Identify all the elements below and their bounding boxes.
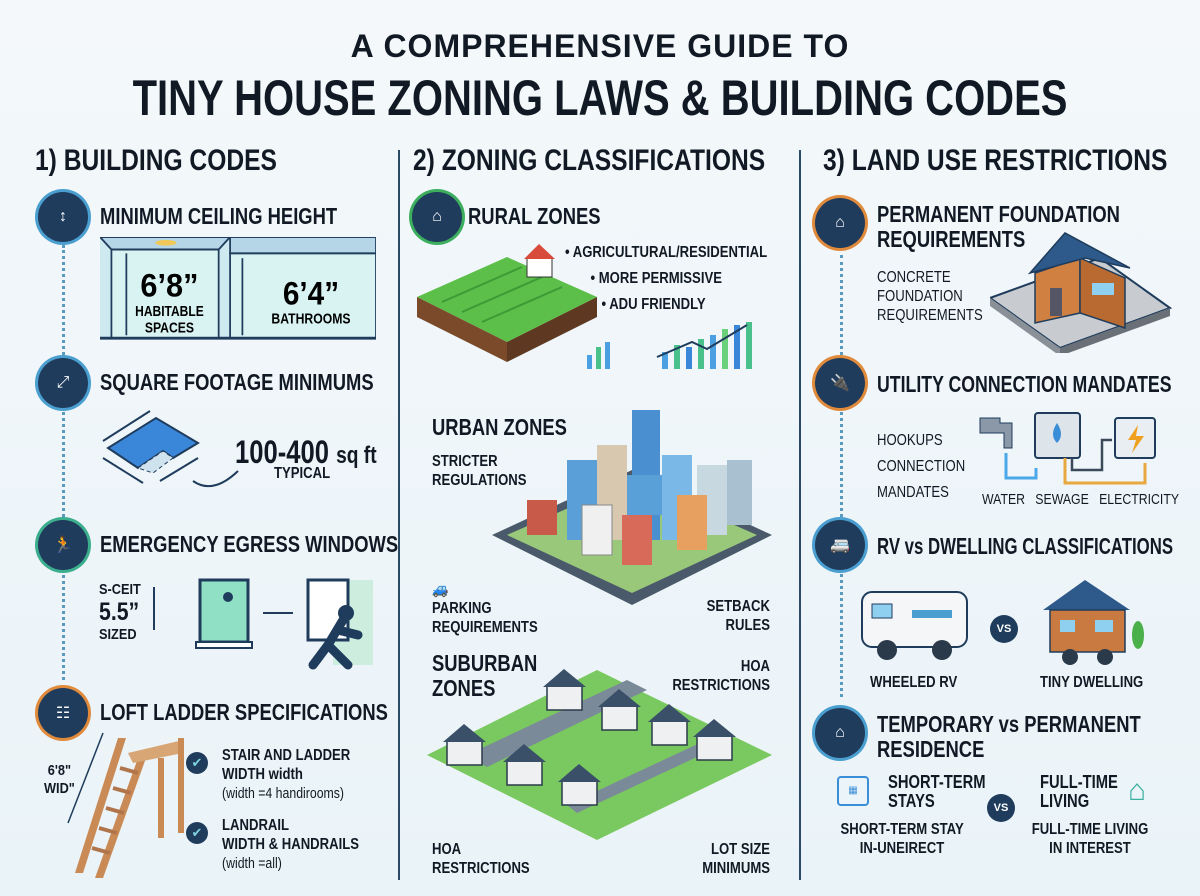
- checklist: WIDTH width: [222, 766, 303, 783]
- labels: WATER SEWAGE ELECTRICITY: [982, 491, 1179, 508]
- window size label: S-CEIT: [99, 581, 141, 598]
- column header 2: 2) ZONING CLASSIFICATIONS: [413, 144, 765, 177]
- checklist: (width =4 handirooms): [222, 785, 344, 802]
- label: parking: 🚙: [432, 581, 448, 598]
- ladder drawing: [67, 732, 184, 878]
- icon: plug: 🔌: [830, 375, 850, 392]
- ladder label: [44, 762, 75, 797]
- label: stricter: [432, 453, 527, 489]
- label: lot size: LOT SIZE: [711, 841, 770, 858]
- icon: exit: 🏃: [53, 537, 73, 554]
- label: hoa top: HOA: [741, 658, 770, 675]
- ceiling diagram: 6’4”: [283, 275, 339, 312]
- panel: permanent foundation: [812, 195, 1172, 353]
- heading: RURAL ZONES: [468, 203, 601, 229]
- short-term: [888, 773, 986, 811]
- panel: loft ladder: [35, 685, 388, 878]
- label: stricter: STRICTER: [432, 453, 498, 470]
- panel: egress windows: [35, 517, 398, 670]
- icon: foundation: ⌂: [835, 214, 845, 231]
- checklist: LANDRAIL: [222, 817, 289, 834]
- vs badge: [990, 615, 1018, 643]
- suburb illustration: [427, 669, 772, 840]
- icon: rural: [412, 192, 462, 242]
- panel: temporary vs permanent: [812, 705, 1148, 857]
- sub labels: [840, 820, 964, 858]
- text: CONCRETE: [877, 269, 951, 286]
- city illustration: [492, 410, 772, 605]
- checklist: [186, 747, 359, 872]
- icon: ladder: ☷: [56, 705, 70, 722]
- label: parking: [432, 581, 538, 636]
- checklist: STAIR AND LADDER: [222, 747, 350, 764]
- text: HOOKUPS: [877, 432, 943, 449]
- icon: expand: [38, 358, 88, 408]
- sub labels: SHORT-TERM STAY: [840, 821, 964, 838]
- icon: foundation: [815, 198, 865, 248]
- label: hoa top: RESTRICTIONS: [672, 677, 770, 694]
- icon: ceiling: ↕: [59, 208, 67, 225]
- heading: ZONES: [432, 675, 495, 701]
- ladder label: WID": [44, 780, 75, 797]
- panel: temporary vs permanent: FULL-TIME LIVING: [1032, 821, 1148, 838]
- heading: PERMANENT FOUNDATION: [877, 201, 1120, 227]
- icon: house: ⌂: [1128, 774, 1146, 807]
- heading: SQUARE FOOTAGE MINIMUMS: [100, 369, 374, 395]
- heading: URBAN ZONES: [432, 414, 567, 440]
- icon: rv: [815, 520, 865, 570]
- panel: square footage: [35, 355, 377, 488]
- heading: REQUIREMENTS: [877, 226, 1025, 252]
- icon: ladder: [38, 688, 88, 738]
- window size label: 5.5”: [99, 598, 139, 626]
- window diagram: [153, 578, 373, 670]
- label: parking: REQUIREMENTS: [432, 619, 538, 636]
- vs badge: VS: [997, 623, 1011, 635]
- rv illustration: [861, 591, 968, 660]
- vs badge: [987, 794, 1015, 822]
- icon: calendar: ▦: [848, 785, 858, 796]
- icon: rural: ⌂: [432, 208, 442, 225]
- icon: calendar: [837, 776, 869, 806]
- label: setback: RULES: [726, 617, 770, 634]
- ceiling diagram: BATHROOMS: [271, 310, 351, 327]
- tiny house illustration: [1043, 580, 1144, 665]
- text: FOUNDATION: [877, 288, 963, 305]
- label: lot size: MINIMUMS: [702, 860, 770, 877]
- icon: plug: [815, 358, 865, 408]
- panel: suburban zones: [427, 650, 772, 877]
- short-term: STAYS: [888, 791, 935, 811]
- column header 1: 1) BUILDING CODES: [35, 144, 277, 177]
- panel: ceiling height: [35, 189, 376, 340]
- checklist: ✔: [192, 825, 202, 840]
- ceiling diagram: SPACES: [145, 319, 194, 336]
- stat: 100-400 sq ft: [235, 434, 377, 470]
- vs badge: VS: [994, 802, 1008, 814]
- icon: rv: 🚐: [830, 537, 850, 554]
- heading: RV vs DWELLING CLASSIFICATIONS: [877, 533, 1173, 559]
- window size label: [99, 581, 141, 643]
- panel: square footage: TYPICAL: [274, 465, 330, 482]
- heading: MINIMUM CEILING HEIGHT: [100, 203, 337, 229]
- label: lot size: [702, 841, 770, 877]
- icon: home: ⌂: [835, 724, 845, 741]
- full-time: FULL-TIME: [1040, 772, 1118, 792]
- floor plan diagram: [102, 410, 239, 488]
- panel: utility connection: [812, 355, 1179, 508]
- text: CONNECTION: [877, 458, 965, 475]
- ladder label: 6'8": [48, 762, 71, 779]
- full-time: LIVING: [1040, 791, 1089, 811]
- icon: expand: ⤢: [57, 374, 69, 391]
- label: hoa bottom: HOA: [432, 841, 461, 858]
- labels: WHEELED RV: [870, 674, 957, 691]
- label: hoa bottom: [432, 841, 530, 877]
- full-time: [1040, 773, 1118, 811]
- bar chart: [587, 322, 752, 369]
- label: stricter: REGULATIONS: [432, 472, 527, 489]
- heading: RESIDENCE: [877, 736, 984, 762]
- farm illustration: [417, 244, 597, 362]
- column header 3: 3) LAND USE RESTRICTIONS: [823, 144, 1167, 177]
- label: setback: SETBACK: [707, 598, 770, 615]
- panel: temporary vs permanent: IN INTEREST: [1049, 840, 1131, 857]
- heading: [877, 201, 1120, 252]
- label: hoa top: [672, 658, 770, 694]
- ceiling diagram: HABITABLE: [135, 302, 204, 319]
- panel: rural zones: [409, 189, 767, 369]
- bullets: [565, 244, 767, 313]
- panel: urban zones: [432, 410, 772, 636]
- label: parking: PARKING: [432, 600, 492, 617]
- checklist: WIDTH & HANDRAILS: [222, 836, 359, 853]
- heading: [877, 711, 1141, 762]
- text: [877, 269, 983, 324]
- sub labels: IN-UNEIRECT: [860, 840, 944, 857]
- utility diagram: [980, 412, 1156, 484]
- ceiling diagram: 6’8”: [140, 267, 198, 304]
- icon: ceiling: [38, 192, 88, 242]
- window size label: SIZED: [99, 626, 137, 643]
- title: TINY HOUSE ZONING LAWS & BUILDING CODES: [133, 70, 1067, 126]
- text: REQUIREMENTS: [877, 307, 983, 324]
- heading: [432, 650, 537, 701]
- heading: EMERGENCY EGRESS WINDOWS: [100, 531, 398, 557]
- label: hoa bottom: RESTRICTIONS: [432, 860, 530, 877]
- icon: home: [815, 708, 865, 758]
- label: setback: [707, 598, 770, 634]
- title: A COMPREHENSIVE GUIDE TO: [351, 28, 849, 64]
- title: [133, 28, 1067, 126]
- heading: UTILITY CONNECTION MANDATES: [877, 371, 1172, 397]
- bullets: • ADU FRIENDLY: [601, 296, 706, 313]
- house on slab: [990, 232, 1172, 353]
- bullets: • AGRICULTURAL/RESIDENTIAL: [565, 244, 767, 261]
- text: [877, 432, 965, 501]
- heading: TEMPORARY vs PERMANENT: [877, 711, 1141, 737]
- panel: rv vs dwelling: TINY DWELLING: [1040, 674, 1143, 691]
- ceiling diagram: [100, 237, 376, 340]
- heading: LOFT LADDER SPECIFICATIONS: [100, 699, 388, 725]
- panel: rv vs dwelling: [812, 517, 1173, 691]
- heading: SUBURBAN: [432, 650, 537, 676]
- short-term: SHORT-TERM: [888, 772, 986, 792]
- text: MANDATES: [877, 484, 949, 501]
- checklist: (width =all): [222, 855, 282, 872]
- bullets: • MORE PERMISSIVE: [591, 270, 722, 287]
- icon: exit: [38, 520, 88, 570]
- checklist: ✔: [192, 755, 202, 770]
